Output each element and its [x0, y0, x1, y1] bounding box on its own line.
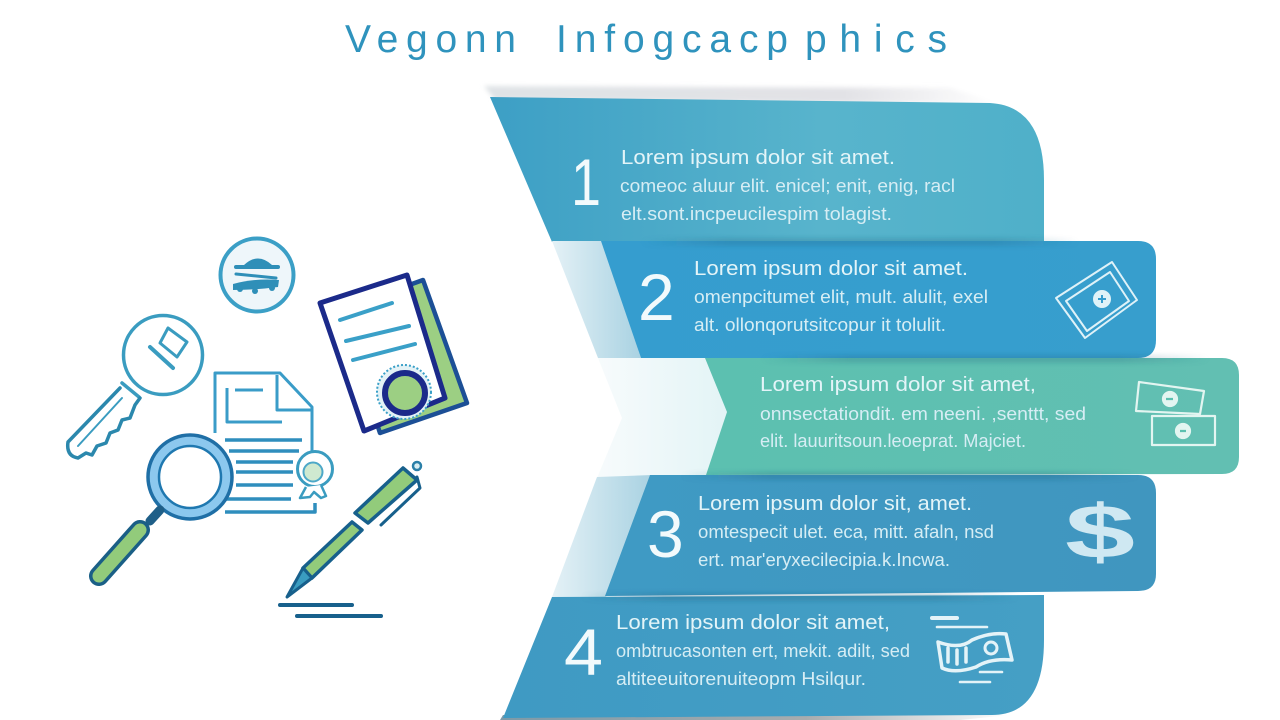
bottom shadow — [500, 715, 1010, 720]
title: Vegonn — [345, 18, 516, 61]
panel: step 2 — [601, 238, 1156, 358]
step 4 text: ombtrucasonten ert, mekit. adilt, sed — [616, 641, 910, 661]
step 3 text: Lorem ipsum dolor sit, amet. — [698, 493, 972, 515]
panel: step 3 — [605, 472, 1156, 596]
title — [345, 18, 947, 61]
panel: step highlighted teal — [705, 355, 1239, 475]
step 1 text: elt.sont.incpeucilespim tolagist. — [621, 204, 892, 224]
step 2 text: omenpcitumet elit, mult. alulit, exel — [694, 287, 988, 307]
step 4 text: Lorem ipsum dolor sit amet, — [616, 612, 890, 634]
teal step text: Lorem ipsum dolor sit amet, — [760, 374, 1036, 396]
step 2 text: Lorem ipsum dolor sit amet. — [694, 258, 968, 280]
pale wedge between teal and step 3 — [552, 475, 652, 597]
icon: banknote — [1056, 262, 1137, 338]
step 1 text — [620, 147, 955, 224]
icon: document with ribbon — [215, 373, 332, 512]
step 1 text: comeoc aluur elit. enicel; enit, enig, racl — [620, 176, 955, 196]
panel: step 1 — [490, 97, 1044, 242]
illustration: documents and tools — [68, 238, 467, 616]
icon: key — [68, 316, 202, 458]
step 2 text — [694, 258, 988, 335]
step 3 text: omtespecit ulet. eca, mitt. afaln, nsd — [698, 522, 994, 542]
step 1 number: 1 — [571, 145, 601, 219]
icon: money stack — [932, 618, 1012, 682]
step 4 text — [616, 612, 910, 689]
step 3 text — [698, 493, 994, 570]
pale wedge between steps 1 and 2 — [552, 241, 641, 358]
title: phics — [805, 18, 947, 61]
step 4 number: 4 — [564, 615, 603, 689]
icon: car badge — [220, 238, 294, 312]
step 2 text: alt. ollonqorutsitcopur it tolulit. — [694, 315, 946, 335]
icon: pen — [280, 462, 421, 616]
icon: certificate document back — [320, 275, 467, 433]
step 3 number: 3 — [647, 497, 684, 571]
pale chevron wedge — [597, 358, 727, 478]
step 1 text: Lorem ipsum dolor sit amet. — [621, 147, 895, 169]
panel: step 4 — [503, 593, 1044, 718]
teal step text — [760, 374, 1086, 451]
icon: two banknotes — [1136, 382, 1215, 445]
teal step text: elit. lauuritsoun.leoeprat. Majciet. — [760, 431, 1026, 451]
icon: magnifying glass — [99, 435, 232, 576]
step 3 text: ert. mar'eryxecilecipia.k.Incwa. — [698, 550, 950, 570]
top shadow — [484, 86, 1000, 104]
step 2 number: 2 — [638, 260, 675, 334]
icon: dollar sign: $ — [1065, 490, 1135, 575]
teal step text: onnsectationdit. em neeni. ,senttt, sed — [760, 404, 1086, 424]
step 4 text: altiteeuitorenuiteopm Hsilqur. — [616, 669, 866, 689]
title: Infogcacp — [556, 18, 788, 61]
